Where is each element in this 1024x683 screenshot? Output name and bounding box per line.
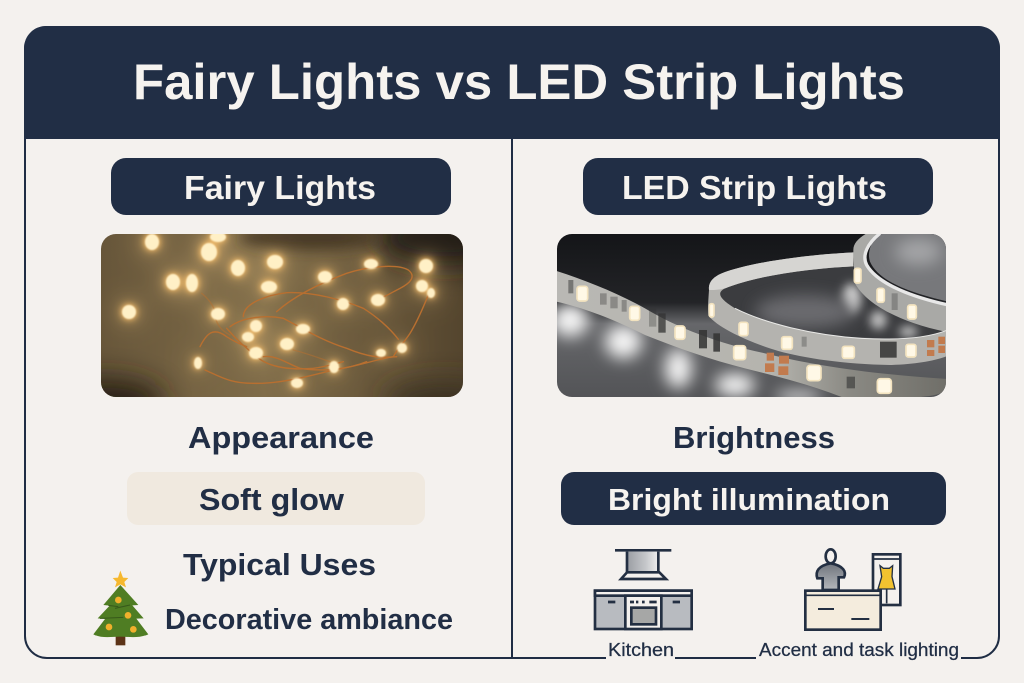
icon: kitchen <box>595 550 692 629</box>
value pill: bright illumination: Bright illumination <box>608 482 890 517</box>
front strip <box>557 271 948 398</box>
value pill: soft glow <box>127 472 425 525</box>
label: typical uses: Typical Uses <box>183 547 376 582</box>
icon: retail counter <box>805 549 900 630</box>
value pill: soft glow: Soft glow <box>199 482 345 517</box>
heading pill: fairy lights: Fairy Lights <box>184 169 376 206</box>
value pill: bright illumination <box>561 472 946 525</box>
LEDs <box>577 268 916 393</box>
floor reflections <box>552 303 822 402</box>
heading pill: fairy lights <box>111 158 451 215</box>
panel: fairy lights <box>93 158 463 646</box>
heading pill: led strip lights <box>583 158 933 215</box>
label: appearance: Appearance <box>188 420 374 455</box>
icon: christmas tree <box>93 571 148 645</box>
label: brightness: Brightness <box>673 420 835 455</box>
inner area of far strip <box>869 233 948 302</box>
circuit traces <box>568 280 898 388</box>
middle strip <box>708 252 948 365</box>
column divider <box>511 139 513 658</box>
bulbs <box>122 232 435 388</box>
far strip <box>853 233 948 332</box>
label: kitchen: Kitchen <box>608 640 674 660</box>
copper pads <box>765 337 945 375</box>
text: decorative ambiance: Decorative ambiance <box>165 604 453 636</box>
copper wire <box>200 266 428 383</box>
floor inside ring <box>712 265 947 340</box>
heading pill: led strip lights: LED Strip Lights <box>622 169 887 206</box>
title banner <box>24 26 1000 139</box>
title: Fairy Lights vs LED Strip Lights <box>133 54 905 110</box>
label: accent and task lighting: Accent and task lighting <box>759 640 959 660</box>
photo: led strip <box>552 233 948 402</box>
panel: led strip lights <box>552 158 961 660</box>
photo: fairy lights <box>101 234 463 397</box>
